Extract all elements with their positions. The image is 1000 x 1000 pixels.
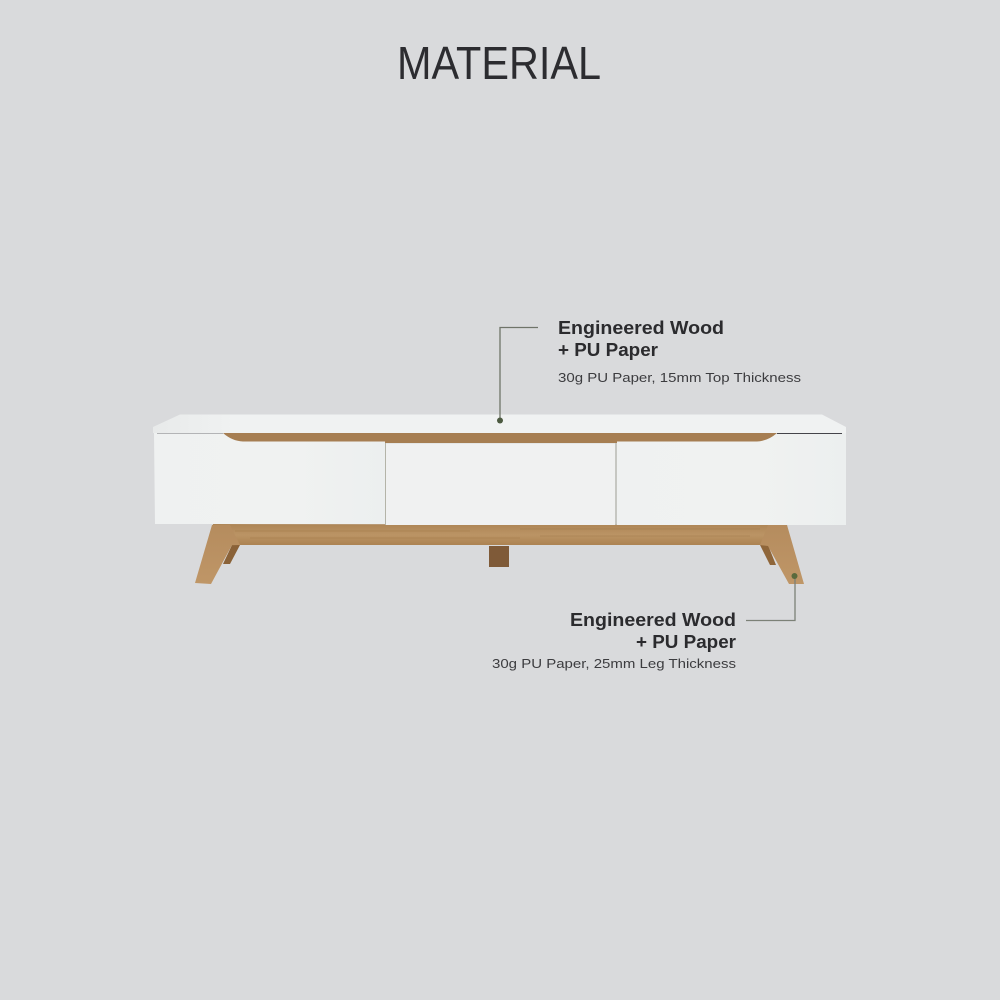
callout: top text: + PU Paper <box>558 340 658 360</box>
back leg right <box>760 545 776 565</box>
title: MATERIAL <box>397 37 601 89</box>
right door <box>617 433 846 525</box>
callout: leg text: + PU Paper <box>636 632 736 652</box>
middle door <box>386 444 615 525</box>
shadow line under top, left and right <box>157 432 842 434</box>
left door <box>154 433 385 524</box>
callout: leg text <box>492 610 737 671</box>
TV console illustration <box>153 414 846 584</box>
callout: leg leader line <box>746 573 798 620</box>
callout: top text <box>558 318 802 385</box>
wood grain on rail <box>235 529 760 538</box>
back leg left <box>223 545 240 564</box>
wooden top band <box>223 433 777 443</box>
callout: top text: 30g PU Paper, 15mm Top Thickness <box>558 370 802 385</box>
center back leg <box>489 546 509 567</box>
callout: leg text: Engineered Wood <box>570 610 736 630</box>
callout: top text: Engineered Wood <box>558 318 724 338</box>
wooden base rail <box>211 524 789 546</box>
left wooden leg <box>195 525 240 584</box>
callout: leg text: 30g PU Paper, 25mm Leg Thickness <box>492 656 737 671</box>
door gaps <box>385 443 616 525</box>
right wooden leg <box>760 525 804 584</box>
tabletop <box>153 414 846 433</box>
callout: top leader line <box>497 328 538 424</box>
